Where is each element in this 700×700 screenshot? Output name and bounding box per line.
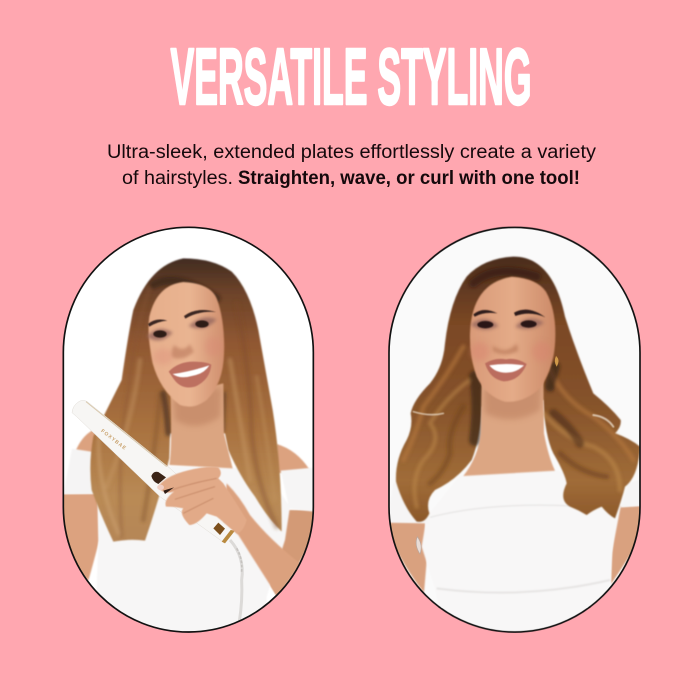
lips and teeth bbox=[169, 362, 211, 387]
capsule outline bbox=[389, 227, 640, 632]
infographic canvas bbox=[62, 47, 641, 633]
description text bbox=[107, 142, 597, 189]
capsule photo content bbox=[60, 227, 317, 633]
nose bbox=[493, 344, 518, 354]
capsule photo content bbox=[387, 227, 647, 633]
lips and teeth bbox=[485, 359, 527, 381]
hair wave highlights bbox=[403, 271, 633, 507]
white top bbox=[63, 449, 317, 633]
brand on iron: FOXYBAE bbox=[99, 428, 128, 452]
cord bbox=[230, 540, 242, 622]
flat iron bbox=[72, 400, 242, 622]
description line 1: Ultra-sleek, extended plates effortlessly create a variety bbox=[107, 142, 597, 163]
capsule outline bbox=[63, 227, 313, 632]
light hair flyaways bbox=[413, 412, 613, 427]
wavy hair bbox=[396, 257, 640, 522]
iron window bbox=[151, 472, 166, 484]
long straight hair bbox=[90, 258, 282, 542]
hair tie bbox=[416, 537, 421, 554]
nose bbox=[172, 344, 194, 359]
panel: wavy hair portrait bbox=[387, 227, 647, 633]
blush bbox=[155, 350, 172, 364]
neck and chest bbox=[169, 383, 233, 468]
face bbox=[470, 277, 559, 402]
eyebrows bbox=[148, 320, 167, 327]
hair strands bbox=[99, 281, 277, 537]
face bbox=[147, 282, 224, 407]
blush bbox=[469, 344, 488, 360]
eyebrows bbox=[473, 310, 497, 317]
eyes bbox=[147, 329, 173, 341]
shoulders and arms bbox=[60, 428, 317, 596]
neck and chest bbox=[463, 380, 555, 476]
description line 2 regular: of hairstyles. bbox=[122, 168, 233, 189]
white top bbox=[390, 504, 640, 594]
eyes bbox=[471, 319, 499, 330]
gold collar bbox=[213, 523, 225, 535]
panel: straight hair photo with flat iron bbox=[60, 227, 317, 633]
description line 2 bold: Straighten, wave, or curl with one tool! bbox=[238, 168, 580, 189]
arms bbox=[387, 505, 647, 593]
earring bbox=[555, 356, 559, 367]
arm and hand bbox=[157, 467, 300, 595]
